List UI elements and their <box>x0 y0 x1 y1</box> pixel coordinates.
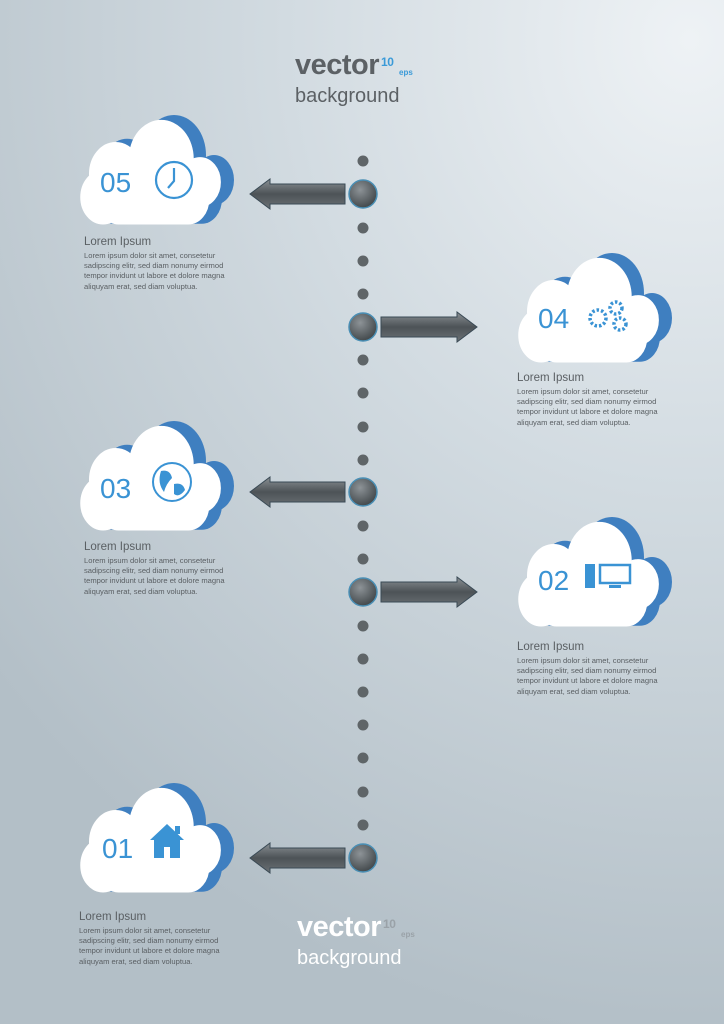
cloud 05: 05 <box>100 167 131 198</box>
text 05: tempor invidunt ut labore et dolore magna <box>84 271 225 280</box>
title top: vector10 <box>295 49 393 81</box>
text 03: tempor invidunt ut labore et dolore magna <box>84 576 225 585</box>
title top: eps <box>399 68 413 77</box>
text 02: tempor invidunt ut labore et dolore magna <box>517 676 658 685</box>
cloud 03 <box>82 421 234 530</box>
cloud 02: 02 <box>538 565 569 596</box>
text 05: aliquyam erat, sed diam voluptua. <box>84 282 198 291</box>
text 05: Lorem Ipsum <box>84 236 151 248</box>
text 03: Lorem Ipsum <box>84 541 151 553</box>
cloud 03: 03 <box>100 473 131 504</box>
text 05 <box>84 236 225 291</box>
text 04: Lorem Ipsum <box>517 372 584 384</box>
title bottom: vector10 <box>297 911 395 943</box>
text 02: sadipscing elitr, sed diam nonumy eirmod <box>517 666 656 675</box>
text 01: Lorem ipsum dolor sit amet, consetetur <box>79 926 210 935</box>
cloud 02 <box>520 517 672 626</box>
text 01: tempor invidunt ut labore et dolore magna <box>79 946 220 955</box>
text 04 <box>517 372 658 427</box>
text 03: sadipscing elitr, sed diam nonumy eirmod <box>84 566 223 575</box>
title bottom: eps <box>401 930 415 939</box>
text 02: Lorem Ipsum <box>517 641 584 653</box>
text 02: aliquyam erat, sed diam voluptua. <box>517 687 631 696</box>
cloud 04 <box>520 253 672 362</box>
cloud 05 <box>82 115 234 224</box>
title bottom: background <box>297 947 402 969</box>
cloud 01 <box>82 783 234 892</box>
text 01: Lorem Ipsum <box>79 911 146 923</box>
arrow: 04 right <box>349 312 477 342</box>
text 03: Lorem ipsum dolor sit amet, consetetur <box>84 556 215 565</box>
text 01: aliquyam erat, sed diam voluptua. <box>79 957 193 966</box>
arrow: 02 right <box>349 577 477 607</box>
text 04: tempor invidunt ut labore et dolore magna <box>517 407 658 416</box>
arrow: 01 left <box>250 843 377 873</box>
text 02: Lorem ipsum dolor sit amet, consetetur <box>517 656 648 665</box>
text 05: Lorem ipsum dolor sit amet, consetetur <box>84 251 215 260</box>
text 04: Lorem ipsum dolor sit amet, consetetur <box>517 387 648 396</box>
arrow: 05 left <box>250 179 377 209</box>
arrow: 03 left <box>250 477 377 507</box>
timeline dots <box>358 156 368 830</box>
cloud 01: 01 <box>102 833 133 864</box>
text 05: sadipscing elitr, sed diam nonumy eirmod <box>84 261 223 270</box>
cloud 04: 04 <box>538 303 569 334</box>
title top: background <box>295 85 400 107</box>
text 04: aliquyam erat, sed diam voluptua. <box>517 418 631 427</box>
text 02 <box>517 641 658 696</box>
title top <box>295 49 413 107</box>
title bottom <box>297 911 415 969</box>
text 01: sadipscing elitr, sed diam nonumy eirmod <box>79 936 218 945</box>
text 03 <box>84 541 225 596</box>
text 01 <box>79 911 220 966</box>
text 03: aliquyam erat, sed diam voluptua. <box>84 587 198 596</box>
text 04: sadipscing elitr, sed diam nonumy eirmod <box>517 397 656 406</box>
